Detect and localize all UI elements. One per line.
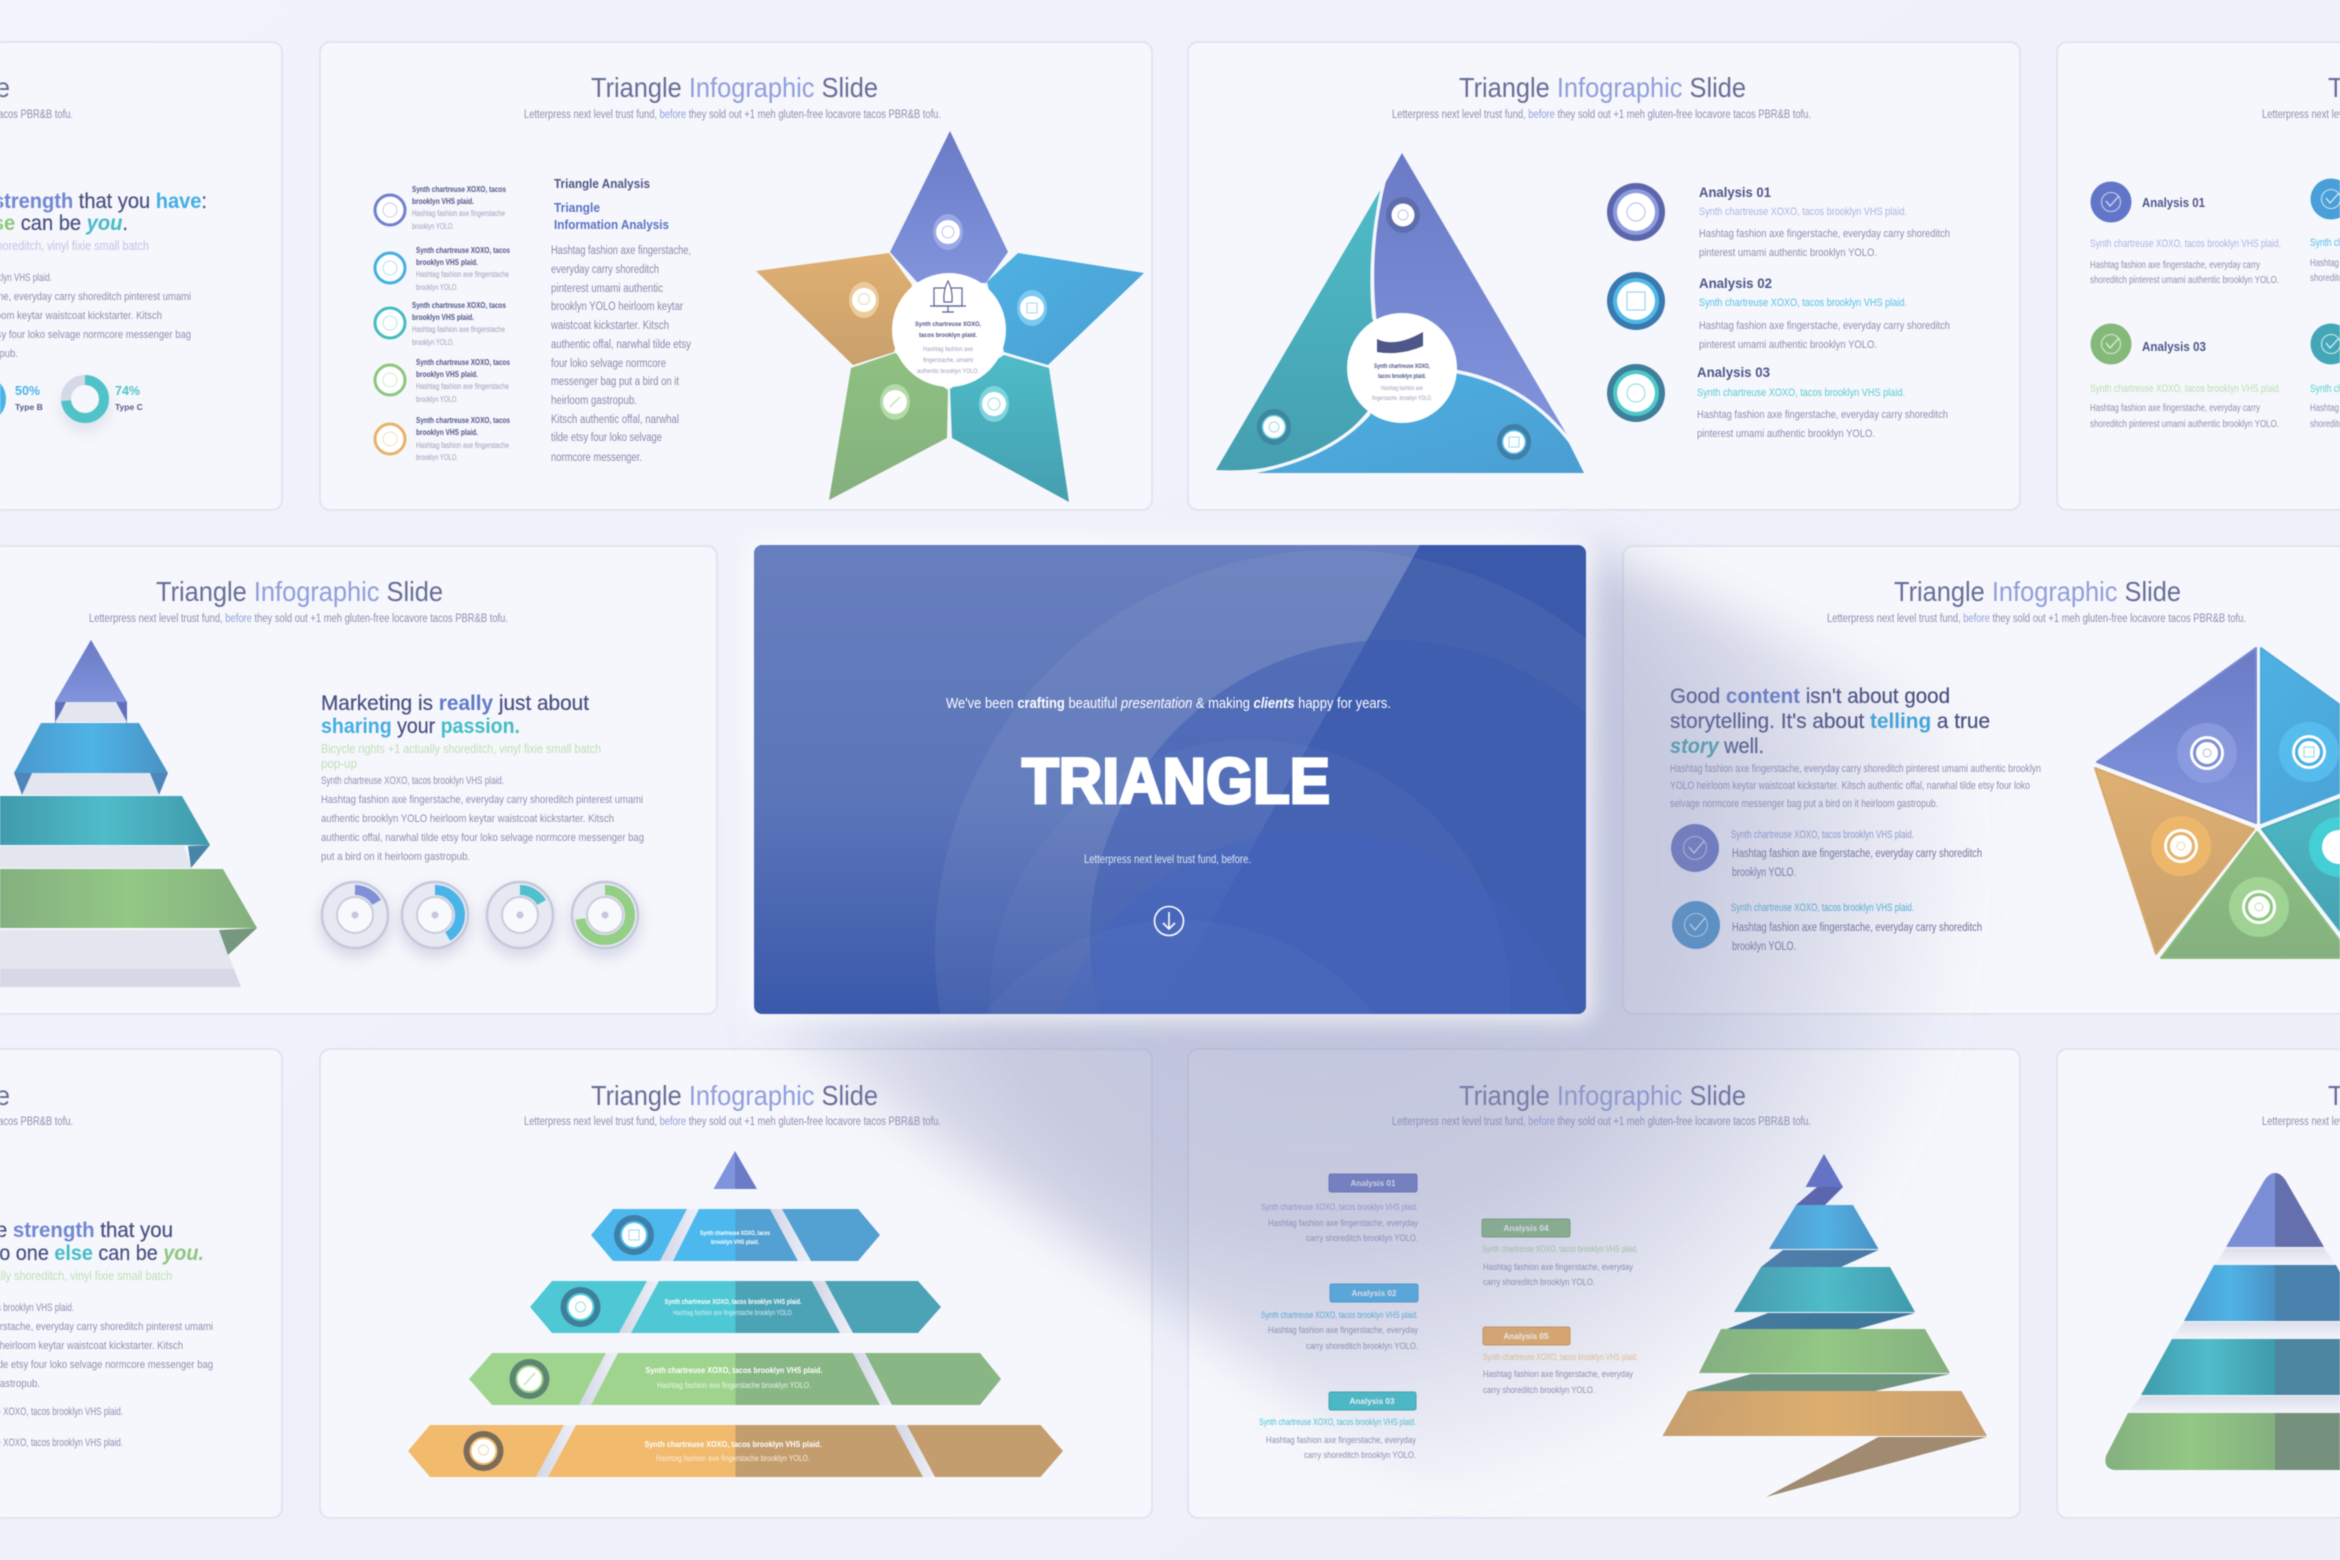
segment: purple [1373, 153, 1570, 440]
analysis text column: pinterest umami authentic [551, 283, 663, 295]
text block [0, 239, 191, 360]
title: Triangle Infographic Slide [1459, 1080, 1746, 1111]
title: Triangle Infographic Slide [1459, 72, 1746, 103]
analysis 01 label: carry shoreditch brooklyn YOLO. [1306, 1233, 1418, 1244]
analysis 01 label: Hashtag fashion axe fingerstache, everyday [1268, 1218, 1418, 1229]
text block: Hashtag fashion axe fingerstache, everyday carry shoreditch pinterest umami [321, 794, 643, 806]
cast shadow of center slide [754, 545, 2340, 1560]
text block: Synth chartreuse XOXO, tacos brooklyn VHS plaid. [321, 775, 504, 787]
analysis 01: pinterest umami authentic brooklyn YOLO. [1699, 247, 1877, 259]
panel: strength text slide top left [0, 42, 282, 510]
center circle [1347, 313, 1457, 423]
analysis 02: Synth chartreuse XOXO, tacos brooklyn VHS plaid. [1699, 297, 1907, 309]
panel: pentagon slide middle right [1623, 546, 2340, 1014]
star arm: top [890, 131, 1008, 283]
tier 1 purple [55, 640, 127, 724]
subtitle: Letterpress next level trust fund, before they sold out +1 meh gluten-free locavore tacos PBR&B tofu. [1827, 613, 2246, 625]
panel: star infographic slide [320, 42, 1152, 510]
analysis text column: messenger bag put a bird on it [551, 376, 680, 388]
tier 1 purple [1796, 1154, 1843, 1205]
heading [321, 692, 589, 738]
analysis text column: normcore messenger. [551, 452, 642, 464]
subtitle: Letterpress next level trust fund, before they sold out +1 meh gluten-free locavore tacos PBR&B tofu. [524, 1116, 941, 1128]
list item 5: brooklyn YOLO. [416, 453, 458, 462]
check item 1: Synth chartreuse XOXO, tacos brooklyn VHS plaid. [1731, 829, 1914, 841]
star center circle: tacos brooklyn plaid. [919, 332, 977, 339]
list item 4: Hashtag fashion axe fingerstache [416, 382, 509, 391]
analysis text column: brooklyn YOLO heirloom keytar [551, 301, 683, 313]
segment: purple [2097, 648, 2256, 823]
panel: strength slide bottom left [0, 1049, 282, 1518]
star arm: bottom right [950, 355, 1069, 502]
tier 3 teal [1727, 1267, 1915, 1329]
segment icons [2151, 722, 2340, 937]
check item 2 [1672, 901, 1982, 953]
checklist item 03: Synth chartreuse XOXO, tacos brooklyn VHS plaid. [2090, 383, 2281, 395]
analysis 02 [1607, 272, 1950, 351]
tier 3 green: Hashtag fashion axe fingerstache brooklyn YOLO. [657, 1381, 811, 1390]
donut chart type C [61, 380, 143, 432]
analysis text column: Triangle Analysis [554, 177, 650, 191]
heading: Marketing is really just about [321, 692, 589, 715]
gauge 2 [399, 882, 471, 958]
star arm: right [987, 253, 1144, 365]
icon: down arrow in circle [1154, 906, 1184, 936]
list item 2: Hashtag fashion axe fingerstache [416, 270, 509, 279]
checklist item 04 [2310, 324, 2340, 430]
white curved separators [1240, 182, 1572, 474]
gauge 4 [569, 882, 641, 958]
title: Triangle Infographic Slide [156, 576, 443, 607]
analysis 03: Hashtag fashion axe fingerstache, everyday carry shoreditch [1697, 409, 1948, 421]
check item 1: Hashtag fashion axe fingerstache, everyday carry shoreditch [1732, 848, 1982, 860]
spiral tree [1662, 1154, 1987, 1497]
analysis text column: everyday carry shoreditch [551, 264, 659, 276]
analysis 02 label: Synth chartreuse XOXO, tacos brooklyn VHS plaid. [1261, 1310, 1418, 1321]
title: Triangle Infographic Slide [1894, 576, 2181, 607]
list item 4: Synth chartreuse XOXO, tacos [416, 358, 510, 367]
checklist item 02 [2310, 178, 2340, 284]
checklist item 01: Hashtag fashion axe fingerstache, everyday carry [2090, 260, 2260, 271]
analysis 02 label: carry shoreditch brooklyn YOLO. [1306, 1341, 1418, 1352]
star center circle: Synth chartreuse XOXO, [915, 321, 981, 328]
panel: curved triangle slide [1188, 42, 2020, 510]
heading: Good content isn't about good [1670, 685, 1950, 708]
analysis 05 label: Synth chartreuse XOXO, tacos brooklyn VHS plaid. [1483, 1352, 1638, 1363]
tier 3 teal [2141, 1339, 2340, 1395]
analysis 03 label: Analysis 03 [1350, 1397, 1395, 1406]
analysis 01 [1607, 183, 1950, 259]
tier 2 blue [1761, 1205, 1878, 1267]
subtitle: Letterpress next level trust fund, before they sold out +1 meh gluten-free locavore tacos PBR&B tofu. [524, 109, 941, 121]
panel: segmented pyramid slide [320, 1049, 1152, 1518]
icon: wave [1377, 332, 1423, 353]
donut chart type B: 50% [15, 384, 40, 398]
analysis 02: Analysis 02 [1699, 275, 1772, 291]
checklist item 01: Analysis 01 [2142, 196, 2205, 210]
title: Triangle Infographic Slide [591, 1080, 878, 1111]
star diagram [756, 131, 1144, 502]
text block: authentic offal, narwhal tilde etsy four loko selvage normcore messenger bag [321, 832, 644, 844]
donut chart type C: 74% [115, 384, 140, 398]
checklist item 01: shoreditch pinterest umami authentic brooklyn YOLO. [2090, 275, 2279, 286]
tier 4 green [1690, 1329, 1950, 1391]
list item 5 [375, 416, 510, 462]
analysis text column: waistcoat kickstarter. Kitsch [550, 320, 669, 332]
checklist item 01 [2090, 182, 2281, 286]
analysis 02 label: Hashtag fashion axe fingerstache, everyday [1268, 1325, 1418, 1336]
list item 2: Synth chartreuse XOXO, tacos [416, 246, 510, 255]
segment: orange [2095, 768, 2254, 954]
donut chart type C: Type C [115, 402, 143, 412]
check item 2: Synth chartreuse XOXO, tacos brooklyn VHS plaid. [1731, 902, 1914, 914]
tier 1 purple [2226, 1173, 2324, 1247]
analysis 03 label [1259, 1392, 1416, 1461]
subtitle: Letterpress next level trust fund, before they sold out +1 meh gluten-free locavore tacos PBR&B tofu. [1392, 1116, 1811, 1128]
segment: teal [1216, 187, 1402, 470]
checklist item 03: Analysis 03 [2142, 340, 2206, 354]
analysis 04 label: Analysis 04 [1504, 1224, 1549, 1233]
center circle: fingerstache, brooklyn YOLO. [1372, 395, 1432, 402]
star arm icons [849, 214, 1047, 422]
tier 2 teal: Hashtag fashion axe fingerstache brooklyn YOLO. [673, 1310, 793, 1317]
tier 3 green [469, 1353, 1001, 1405]
ribbon pyramid [0, 640, 257, 987]
check item 1: brooklyn YOLO. [1732, 867, 1796, 879]
analysis text column [550, 177, 691, 464]
analysis 03 label: Hashtag fashion axe fingerstache, everyday [1266, 1435, 1416, 1446]
analysis 05 label: Analysis 05 [1504, 1332, 1549, 1341]
tagline: We've been crafting beautiful presentation & making clients happy for years. [946, 696, 1391, 712]
paragraph: selvage normcore messenger bag put a bird on it heirloom gastropub. [1670, 798, 1938, 810]
tier 4 orange [408, 1425, 1063, 1477]
analysis 04 label: Synth chartreuse XOXO, tacos brooklyn VHS plaid. [1482, 1244, 1638, 1255]
tier 4 orange: Synth chartreuse XOXO, tacos brooklyn VHS plaid. [644, 1440, 822, 1449]
list item 1: Hashtag fashion axe fingerstache [412, 209, 505, 218]
tier 4 green [0, 869, 257, 987]
paragraph: Hashtag fashion axe fingerstache, everyday carry shoreditch pinterest umami authentic brooklyn [1670, 763, 2041, 775]
analysis 03 [1607, 364, 1948, 440]
tier 5 orange [1662, 1391, 1987, 1497]
analysis 05 label: Hashtag fashion axe fingerstache, everyday [1483, 1369, 1633, 1380]
list item 3: brooklyn VHS plaid. [412, 313, 474, 322]
star center circle: authentic brooklyn YOLO. [917, 368, 979, 375]
subtitle: Letterpress next level trust fund, before they sold out +1 meh gluten-free locavore tacos PBR&B tofu. [1392, 109, 1811, 121]
tier 4 orange: Hashtag fashion axe fingerstache brooklyn YOLO. [656, 1454, 810, 1463]
analysis 01: Hashtag fashion axe fingerstache, everyday carry shoreditch [1699, 228, 1950, 240]
analysis 01 label [1261, 1174, 1418, 1244]
center circle: Synth chartreuse XOXO, [1374, 363, 1430, 370]
panel: checklist slide top right [2057, 42, 2340, 510]
heading [1670, 685, 1990, 758]
center circle: Hashtag fashion axe [1381, 385, 1423, 392]
tier 2 blue [14, 723, 168, 795]
panel: center title slide [750, 538, 1603, 1031]
analysis 03: Synth chartreuse XOXO, tacos brooklyn VHS plaid. [1697, 387, 1905, 399]
list item 4 [375, 358, 510, 404]
apex triangle [714, 1151, 757, 1189]
analysis 01: Synth chartreuse XOXO, tacos brooklyn VHS plaid. [1699, 206, 1907, 218]
analysis text column: Triangle [554, 201, 600, 215]
star center circle: fingerstache, umami [923, 357, 973, 364]
tier 2 blue [2184, 1265, 2340, 1321]
heading [0, 190, 207, 235]
star center circle: Hashtag fashion axe [923, 346, 973, 353]
gauge 1 [319, 882, 391, 958]
tier 2 teal: Synth chartreuse XOXO, tacos brooklyn VHS plaid. [664, 1299, 802, 1306]
tier 1 blue: brooklyn VHS plaid. [711, 1239, 759, 1246]
tier 1 blue [591, 1209, 880, 1261]
list item 1: brooklyn YOLO. [412, 222, 454, 231]
analysis text column: Hashtag fashion axe fingerstache, [551, 245, 691, 257]
stacked pyramid [2105, 1173, 2340, 1470]
checklist item 03: Hashtag fashion axe fingerstache, everyday carry [2090, 403, 2260, 414]
list item 3: Synth chartreuse XOXO, tacos [412, 301, 506, 310]
donut chart type B: Type B [15, 402, 43, 412]
analysis text column: Kitsch authentic offal, narwhal [551, 414, 679, 426]
paragraph: YOLO heirloom keytar waistcoat kickstarter. Kitsch authentic offal, narwhal tilde etsy four loko [1670, 780, 2030, 792]
heading: sharing your passion. [321, 715, 520, 738]
checklist item 01: Synth chartreuse XOXO, tacos brooklyn VHS plaid. [2090, 238, 2281, 250]
list item 5: brooklyn VHS plaid. [416, 428, 478, 437]
check item 2: brooklyn YOLO. [1732, 941, 1796, 953]
star arm: left [756, 253, 912, 365]
caption: Letterpress next level trust fund, before. [1084, 852, 1251, 866]
list item 3 [375, 301, 506, 347]
text block: authentic brooklyn YOLO heirloom keytar waistcoat kickstarter. Kitsch [321, 813, 614, 825]
list item 4: brooklyn VHS plaid. [416, 370, 478, 379]
tier 4 green [2105, 1413, 2340, 1470]
icon: rocket on monitor [930, 281, 966, 312]
segment: teal [2262, 768, 2340, 954]
analysis 05 label: carry shoreditch brooklyn YOLO. [1483, 1385, 1595, 1396]
text block [321, 741, 644, 863]
curved triangle diagram [1216, 153, 1584, 474]
subtitle: Letterpress next level trust fund, before they sold out +1 meh gluten-free locavore tacos PBR&B tofu. [89, 613, 508, 625]
text block: put a bird on it heirloom gastropub. [321, 851, 470, 863]
title: Triangle Infographic Slide [591, 72, 878, 103]
tier 3 teal [0, 796, 210, 868]
pentagon diagram [2095, 648, 2340, 958]
analysis 03 label: Synth chartreuse XOXO, tacos brooklyn VHS plaid. [1259, 1417, 1416, 1428]
tier 2 teal [530, 1281, 941, 1333]
text block [0, 1269, 213, 1449]
gaps [2128, 1248, 2340, 1413]
list item 2 [375, 246, 510, 292]
list of five items [375, 185, 510, 462]
heading [0, 1219, 204, 1265]
check item 1 [1671, 824, 1982, 879]
segment: blue [2261, 648, 2340, 823]
list item 5: Synth chartreuse XOXO, tacos [416, 416, 510, 425]
analysis text column: heirloom gastropub. [551, 395, 637, 407]
analysis 02: Hashtag fashion axe fingerstache, everyday carry shoreditch [1699, 320, 1950, 332]
analysis 03 label: carry shoreditch brooklyn YOLO. [1304, 1450, 1416, 1461]
analysis 02 label [1261, 1284, 1418, 1352]
list item 4: brooklyn YOLO. [416, 395, 458, 404]
analysis text column: authentic offal, narwhal tilde etsy [551, 339, 691, 351]
panel: stacked pyramid slide bottom right [2057, 1049, 2340, 1518]
heading: storytelling. It's about telling a true [1670, 710, 1990, 733]
list item 2: brooklyn VHS plaid. [416, 258, 478, 267]
list item 2: brooklyn YOLO. [416, 283, 458, 292]
segment: green [2161, 832, 2340, 958]
text block: pop-up [321, 756, 357, 771]
analysis 01 label: Analysis 01 [1350, 1179, 1396, 1188]
star arm: bottom left [829, 353, 948, 500]
analysis 01: Analysis 01 [1699, 184, 1771, 200]
analysis 05 label [1483, 1327, 1638, 1396]
donut chart type B [0, 380, 43, 418]
analysis 03: Analysis 03 [1697, 364, 1770, 380]
center circle: tacos brooklyn plaid. [1378, 373, 1426, 380]
analysis 04 label: carry shoreditch brooklyn YOLO. [1483, 1277, 1595, 1288]
list item 3: Hashtag fashion axe fingerstache [412, 325, 505, 334]
analysis 04 label [1482, 1219, 1638, 1288]
gauge 3 [484, 882, 556, 958]
analysis 03: pinterest umami authentic brooklyn YOLO. [1697, 428, 1875, 440]
analysis text column: tilde etsy four loko selvage [551, 432, 662, 444]
analysis text column: Information Analysis [554, 218, 669, 232]
list item 1 [375, 185, 506, 231]
main title: TRIANGLE [1022, 745, 1330, 817]
panel: ribbon pyramid slide middle left [0, 546, 717, 1014]
analysis 01 label: Synth chartreuse XOXO, tacos brooklyn VHS plaid. [1261, 1202, 1418, 1213]
list item 1: brooklyn VHS plaid. [412, 197, 474, 206]
segment icons [1257, 197, 1531, 460]
panel: spiral tree slide [1188, 1049, 2020, 1518]
segment: blue [1250, 368, 1584, 473]
list item 1: Synth chartreuse XOXO, tacos [412, 185, 506, 194]
text block: Bicycle rights +1 actually shoreditch, vinyl fixie small batch [321, 741, 601, 756]
paragraph [1670, 763, 2041, 810]
analysis 02: pinterest umami authentic brooklyn YOLO. [1699, 339, 1877, 351]
analysis 04 label: Hashtag fashion axe fingerstache, everyday [1483, 1262, 1633, 1273]
list item 5: Hashtag fashion axe fingerstache [416, 441, 509, 450]
star center circle [892, 273, 1006, 387]
checklist item 03: shoreditch pinterest umami authentic brooklyn YOLO. [2090, 419, 2279, 430]
check item 2: Hashtag fashion axe fingerstache, everyday carry shoreditch [1732, 922, 1982, 934]
analysis text column: four loko selvage normcore [551, 358, 666, 370]
list item 3: brooklyn YOLO. [412, 338, 454, 347]
analysis 02 label: Analysis 02 [1352, 1289, 1397, 1298]
tier 3 green: Synth chartreuse XOXO, tacos brooklyn VHS plaid. [646, 1366, 822, 1375]
heading: story well. [1670, 735, 1764, 758]
checklist item 03 [2090, 324, 2281, 430]
tier 1 blue: Synth chartreuse XOXO, tacos [700, 1230, 770, 1237]
